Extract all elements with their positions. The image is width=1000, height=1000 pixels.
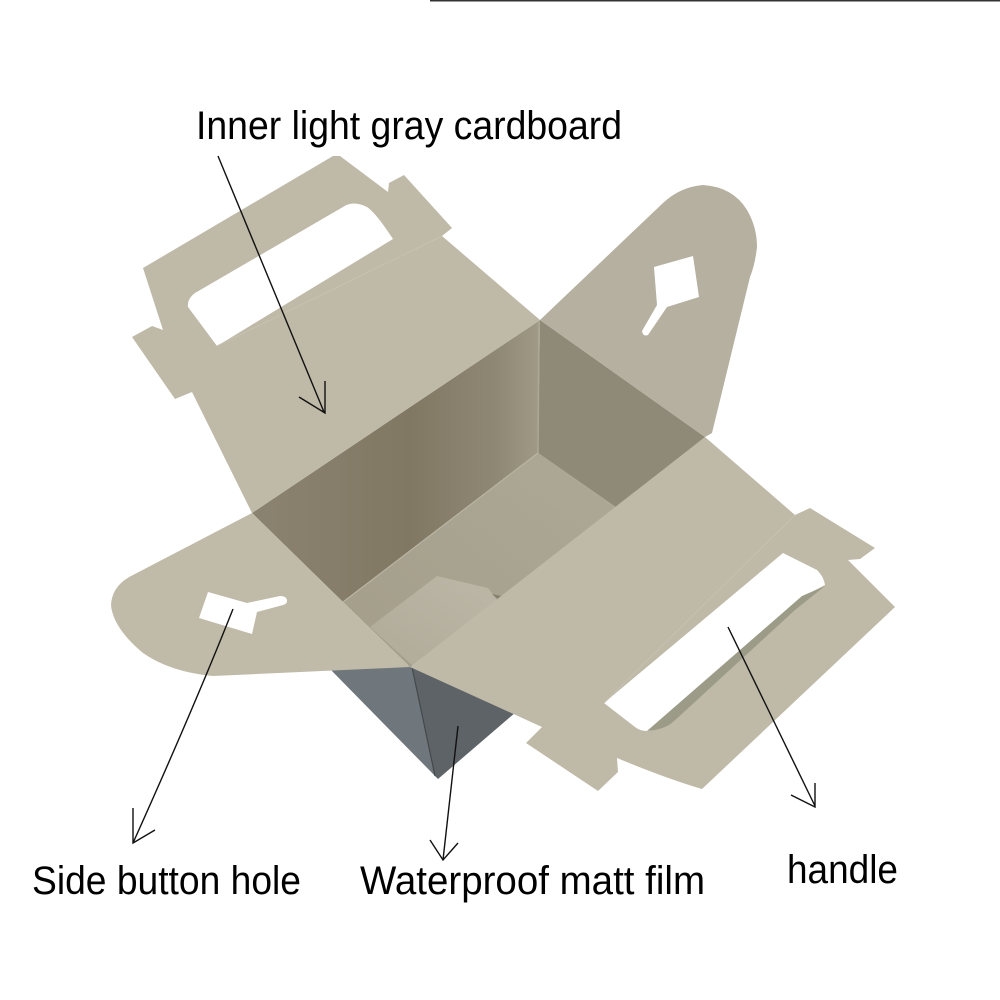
arrow: to inner cardboard xyxy=(218,156,325,413)
flap: top-left handle xyxy=(132,156,540,513)
inner right wall xyxy=(538,320,705,508)
flap: left with button hole xyxy=(111,513,410,676)
arrow: to waterproof film label xyxy=(430,726,458,860)
floor tear mark xyxy=(492,594,506,601)
inner corner fold xyxy=(538,322,539,453)
outer waterproof film base xyxy=(329,665,516,779)
label: handle: handle xyxy=(787,848,898,892)
handle shadow xyxy=(647,586,825,731)
flap: top-right with button hole xyxy=(540,185,757,437)
label: side button hole: Side button hole xyxy=(32,859,301,903)
arrow: to side button hole label xyxy=(133,609,233,843)
box illustration xyxy=(111,156,895,791)
inner left wall xyxy=(252,320,540,602)
top edge line xyxy=(430,0,1000,2)
flap: right handle xyxy=(410,437,895,791)
inner floor flap xyxy=(370,576,497,665)
label: waterproof matt film: Waterproof matt film xyxy=(360,859,705,903)
inner floor xyxy=(343,453,617,667)
label: inner light gray cardboard: Inner light gray cardboard xyxy=(196,104,622,148)
crease lines xyxy=(217,236,795,703)
arrow: to handle label xyxy=(728,627,815,807)
floor strip line xyxy=(343,453,538,602)
